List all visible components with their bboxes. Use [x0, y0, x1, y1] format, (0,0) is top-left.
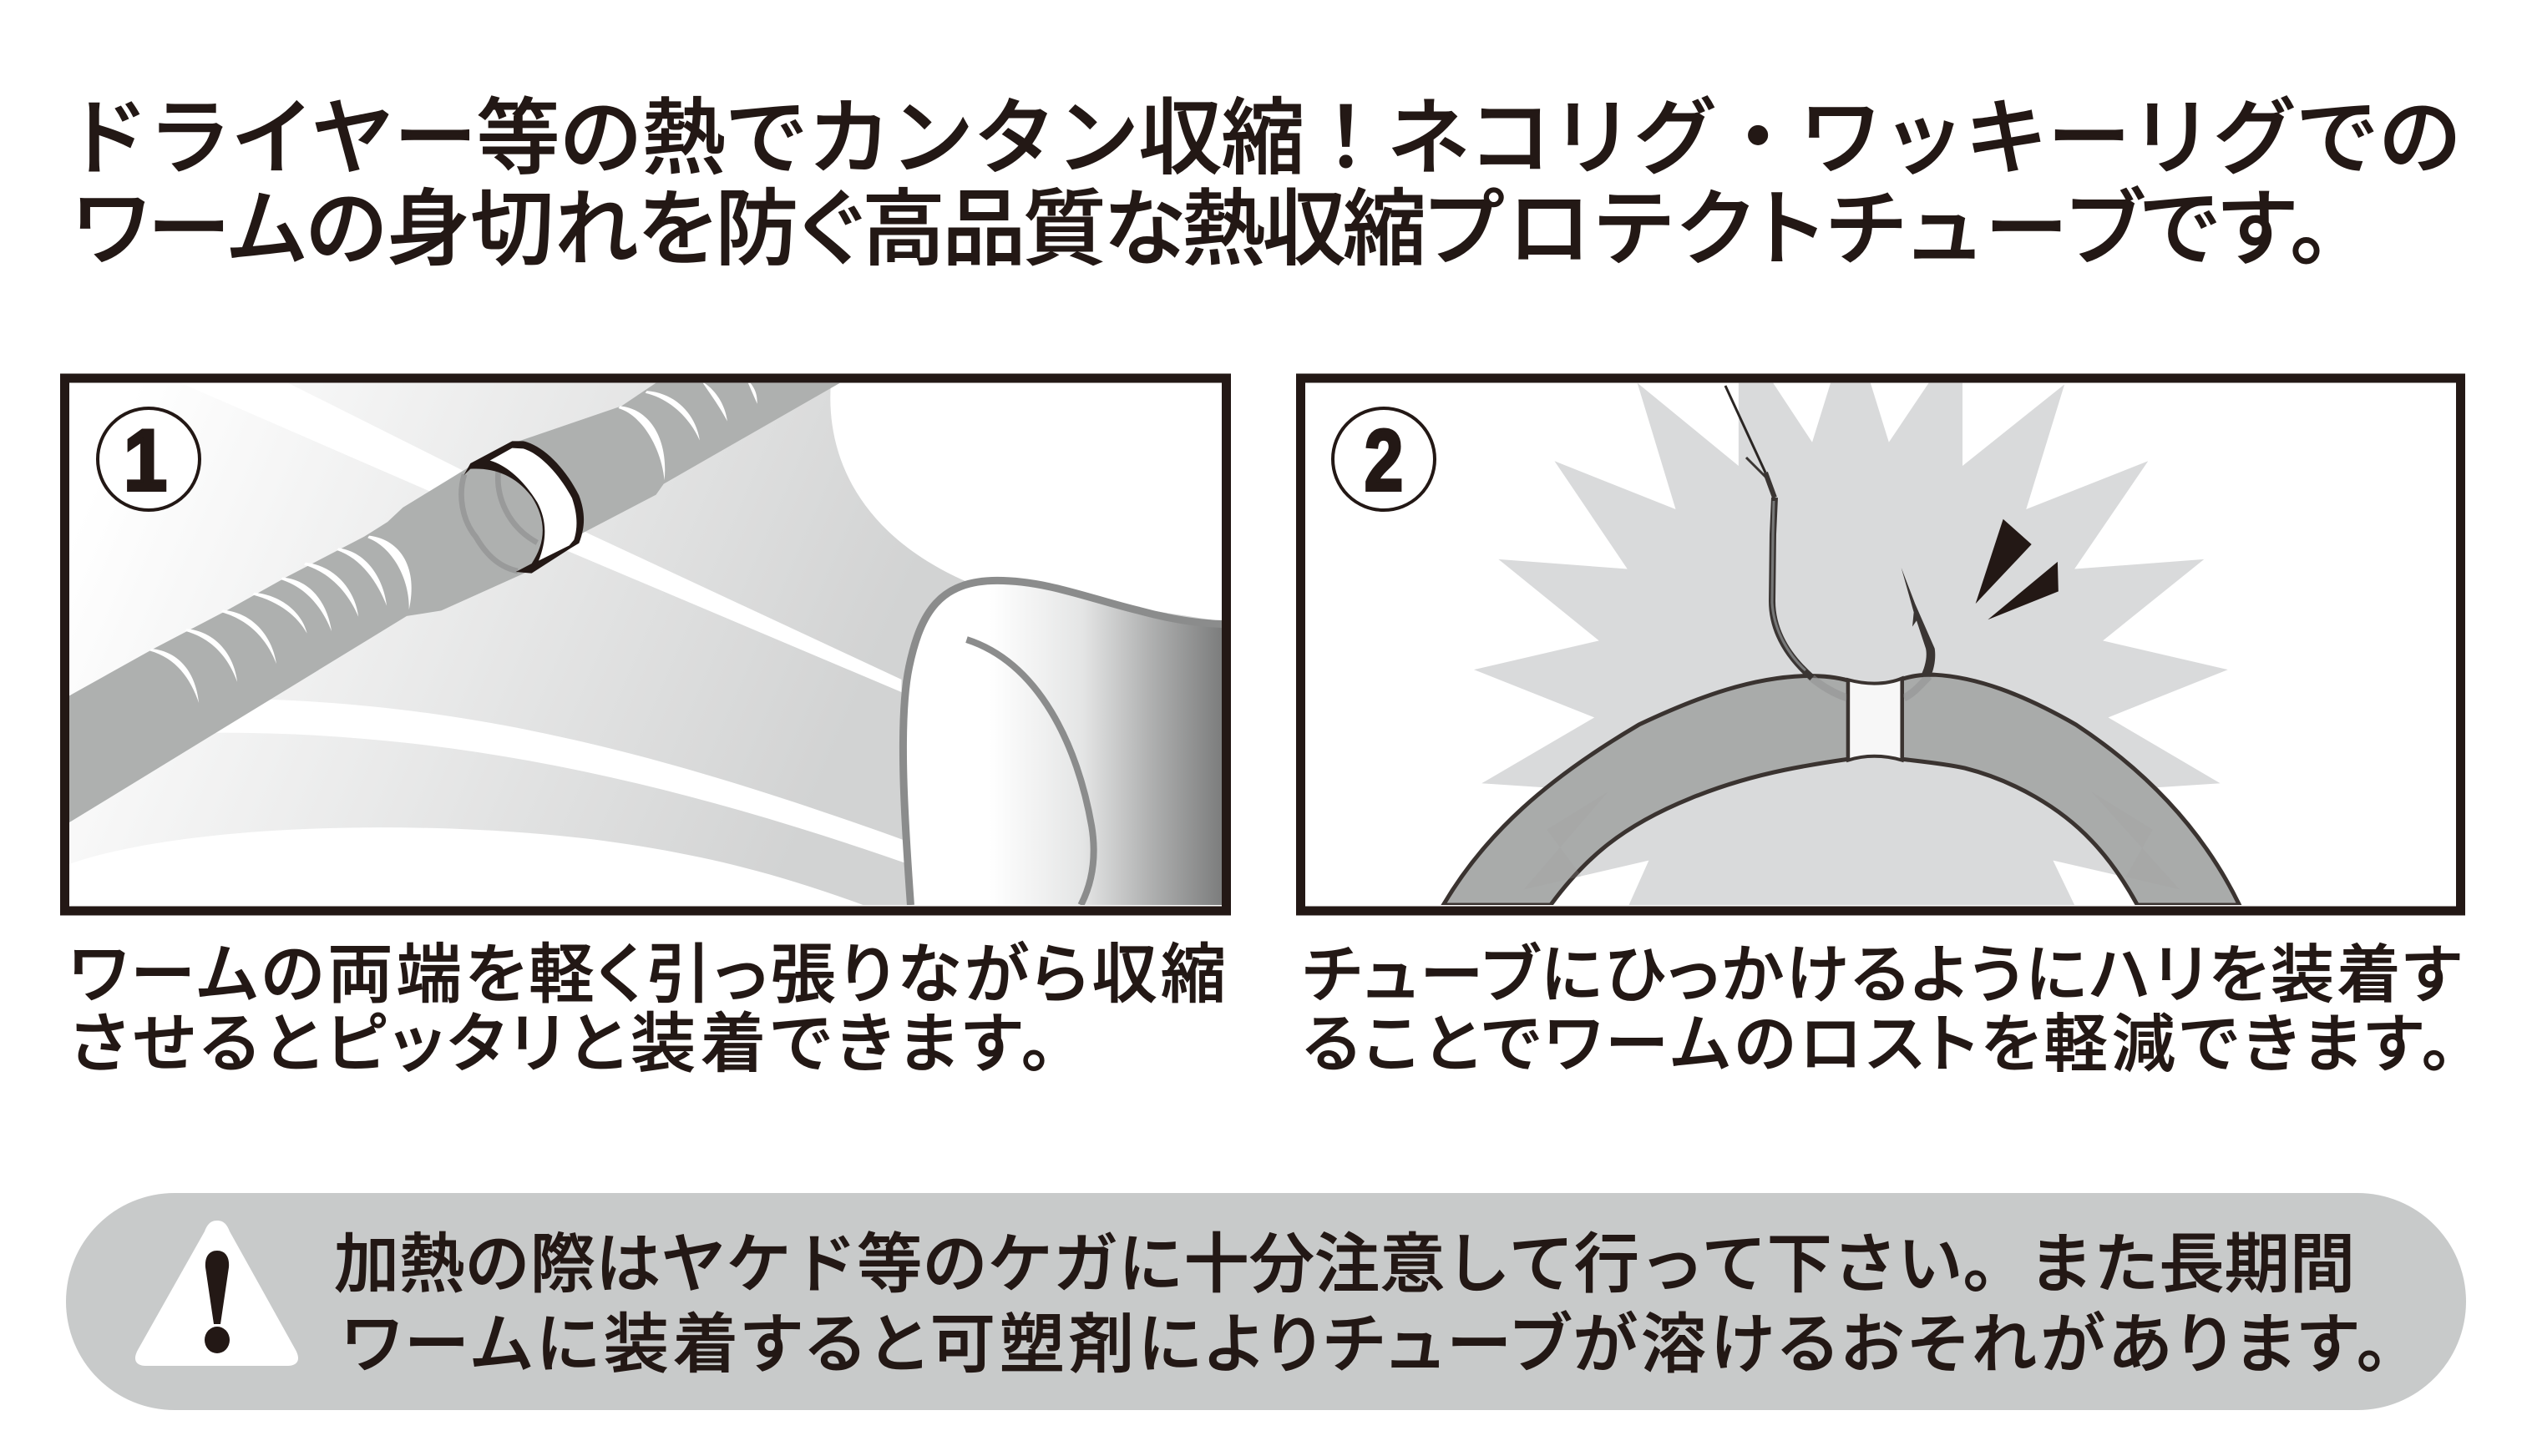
faint burst shading inside worm — [1568, 870, 1582, 879]
frame — [1301, 378, 2460, 911]
frame — [65, 378, 1226, 911]
hook — [1725, 386, 1935, 698]
step number 1 — [98, 408, 200, 510]
tube band — [1848, 679, 1902, 761]
icon: warning triangle — [135, 1221, 298, 1366]
title: ワームの身切れを防ぐ — [73, 183, 862, 276]
worm arch — [1443, 675, 1848, 905]
panel: step 2 — [1301, 378, 2460, 911]
caption: step 2 — [1303, 940, 2461, 1080]
caption: step 2: チューブにひっかけるようにハリを装着す — [1303, 940, 2461, 1011]
caption: step 1: させるとピッタリと装着できます。 — [69, 1007, 1053, 1080]
worm body — [69, 383, 840, 822]
hand — [903, 580, 1222, 905]
step number 1: 1 — [124, 411, 167, 508]
warning text: 加熱の際はヤケド等のケガに十分注意して行って下さい。また長期間 — [334, 1227, 2355, 1301]
title: 高品質な熱収縮 — [862, 183, 1426, 276]
caption: step 2: ることでワームのロストを軽減できます。 — [1303, 1009, 2453, 1080]
step number 2 — [1333, 408, 1435, 510]
burst — [1474, 383, 2228, 905]
illustration: hook through tube — [1443, 383, 2240, 905]
caption: step 1 — [69, 938, 1226, 1080]
title — [65, 92, 2462, 276]
panel: step 1 — [65, 378, 1226, 911]
title: です。 — [2141, 183, 2331, 276]
title: プロテクトチューブ — [1426, 183, 2145, 276]
worm segment highlights — [149, 383, 757, 703]
heat shrink tube ring — [461, 441, 584, 574]
warning text: ワームに装着すると可塑剤によりチューブが溶けるおそれがあります。 — [342, 1307, 2388, 1381]
warning box — [66, 1193, 2466, 1410]
caption: step 1: ワームの両端を軽く引っ張りながら収縮 — [69, 938, 1226, 1011]
illustration: tube being heated by dryer — [69, 383, 1222, 905]
impact marks — [1976, 519, 2059, 619]
step number 2: 2 — [1365, 412, 1403, 508]
title: ドライヤー等の熱でカンタン収縮！ネコリグ・ワッキーリグでの — [65, 92, 2462, 185]
warning text — [334, 1227, 2388, 1381]
